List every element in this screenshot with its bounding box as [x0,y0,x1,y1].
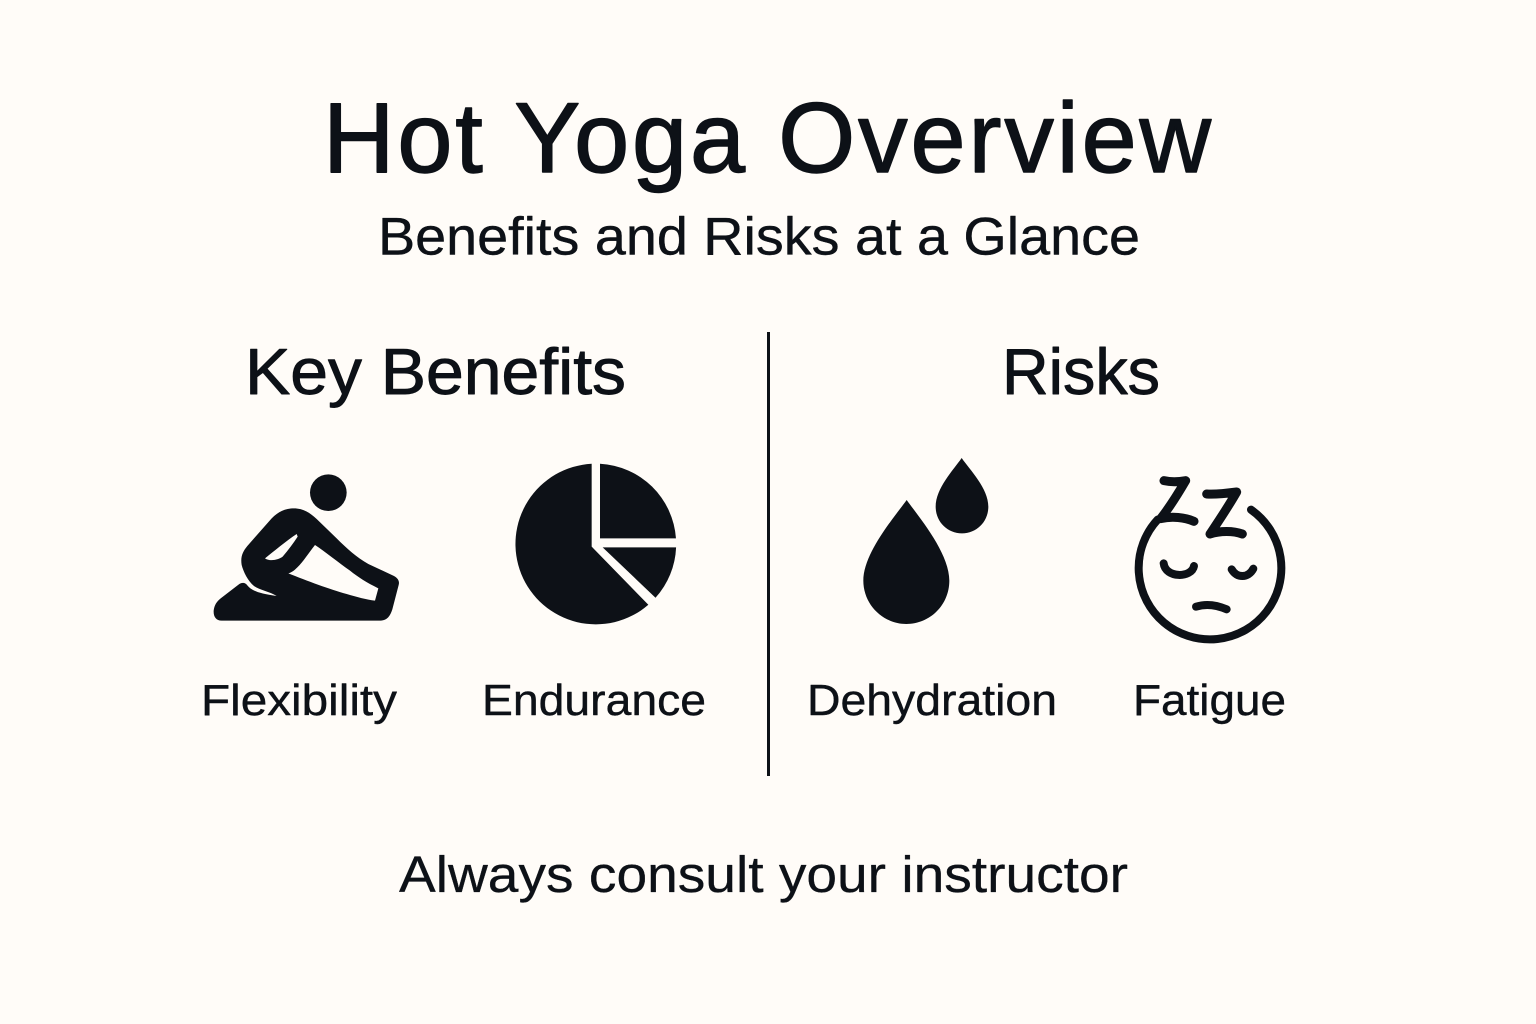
panel: risks [807,335,1286,725]
subtitle: Benefits and Risks at a Glance [378,208,1140,266]
icon: pie chart [515,464,676,624]
label: fatigue: Fatigue [1133,676,1286,725]
panel: key benefits [201,335,706,725]
heading: risks: Risks [1002,335,1160,408]
heading: key benefits: Key Benefits [245,335,626,408]
icon: stretching figure [214,474,399,621]
label: dehydration: Dehydration [807,676,1057,725]
label: endurance: Endurance [482,676,706,725]
icon: water drops [863,458,988,624]
label: flexibility: Flexibility [201,676,397,725]
title: Hot Yoga Overview [323,82,1212,193]
footer note: Always consult your instructor [399,846,1128,903]
icon: sleepy face [1139,481,1281,639]
